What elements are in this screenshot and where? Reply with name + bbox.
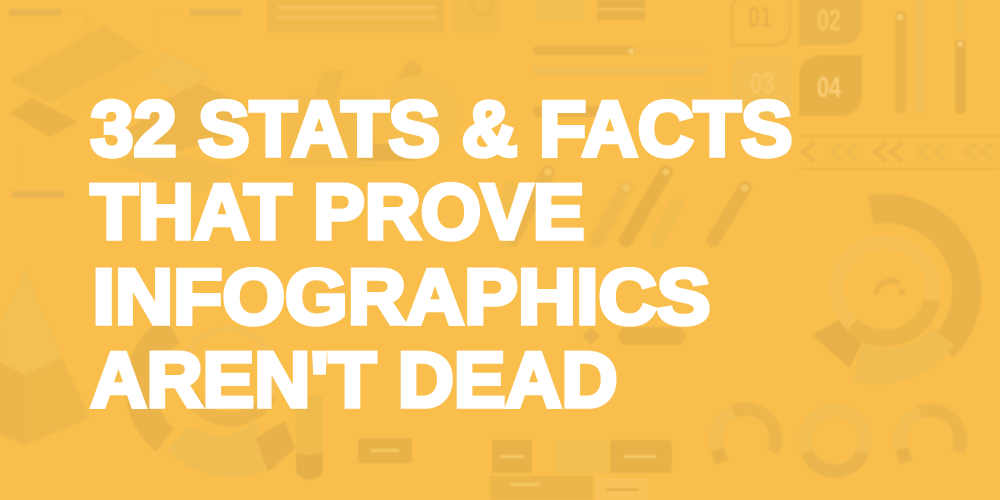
tile 03: 03	[750, 68, 774, 100]
pyramid	[0, 268, 90, 445]
vertical sliders	[895, 0, 966, 114]
chevron strip	[800, 136, 1000, 169]
title line 4: AREN'T DEAD	[90, 336, 618, 424]
donut 3	[900, 410, 960, 462]
title line 1: 32 STATS & FACTS	[90, 84, 792, 172]
tile 04: 04	[817, 72, 841, 104]
donut 1	[715, 409, 776, 462]
donut 2	[805, 410, 865, 471]
large donut chart	[812, 209, 967, 384]
left donut and cylinder	[140, 329, 323, 479]
lower boxes	[358, 327, 686, 500]
small donut charts	[715, 409, 960, 471]
tile 02: 02	[817, 5, 841, 37]
title	[90, 84, 792, 424]
numbered tiles	[732, 0, 862, 116]
diagonal pills	[505, 172, 745, 240]
central figure	[287, 60, 460, 166]
isometric layers	[9, 9, 250, 198]
pill dots	[544, 168, 748, 192]
top text panels	[267, 0, 645, 32]
horizontal sliders	[533, 46, 710, 117]
title line 3: INFOGRAPHICS	[92, 252, 710, 340]
title line 2: THAT PROVE	[90, 168, 584, 256]
tile 01: 01	[748, 2, 772, 34]
